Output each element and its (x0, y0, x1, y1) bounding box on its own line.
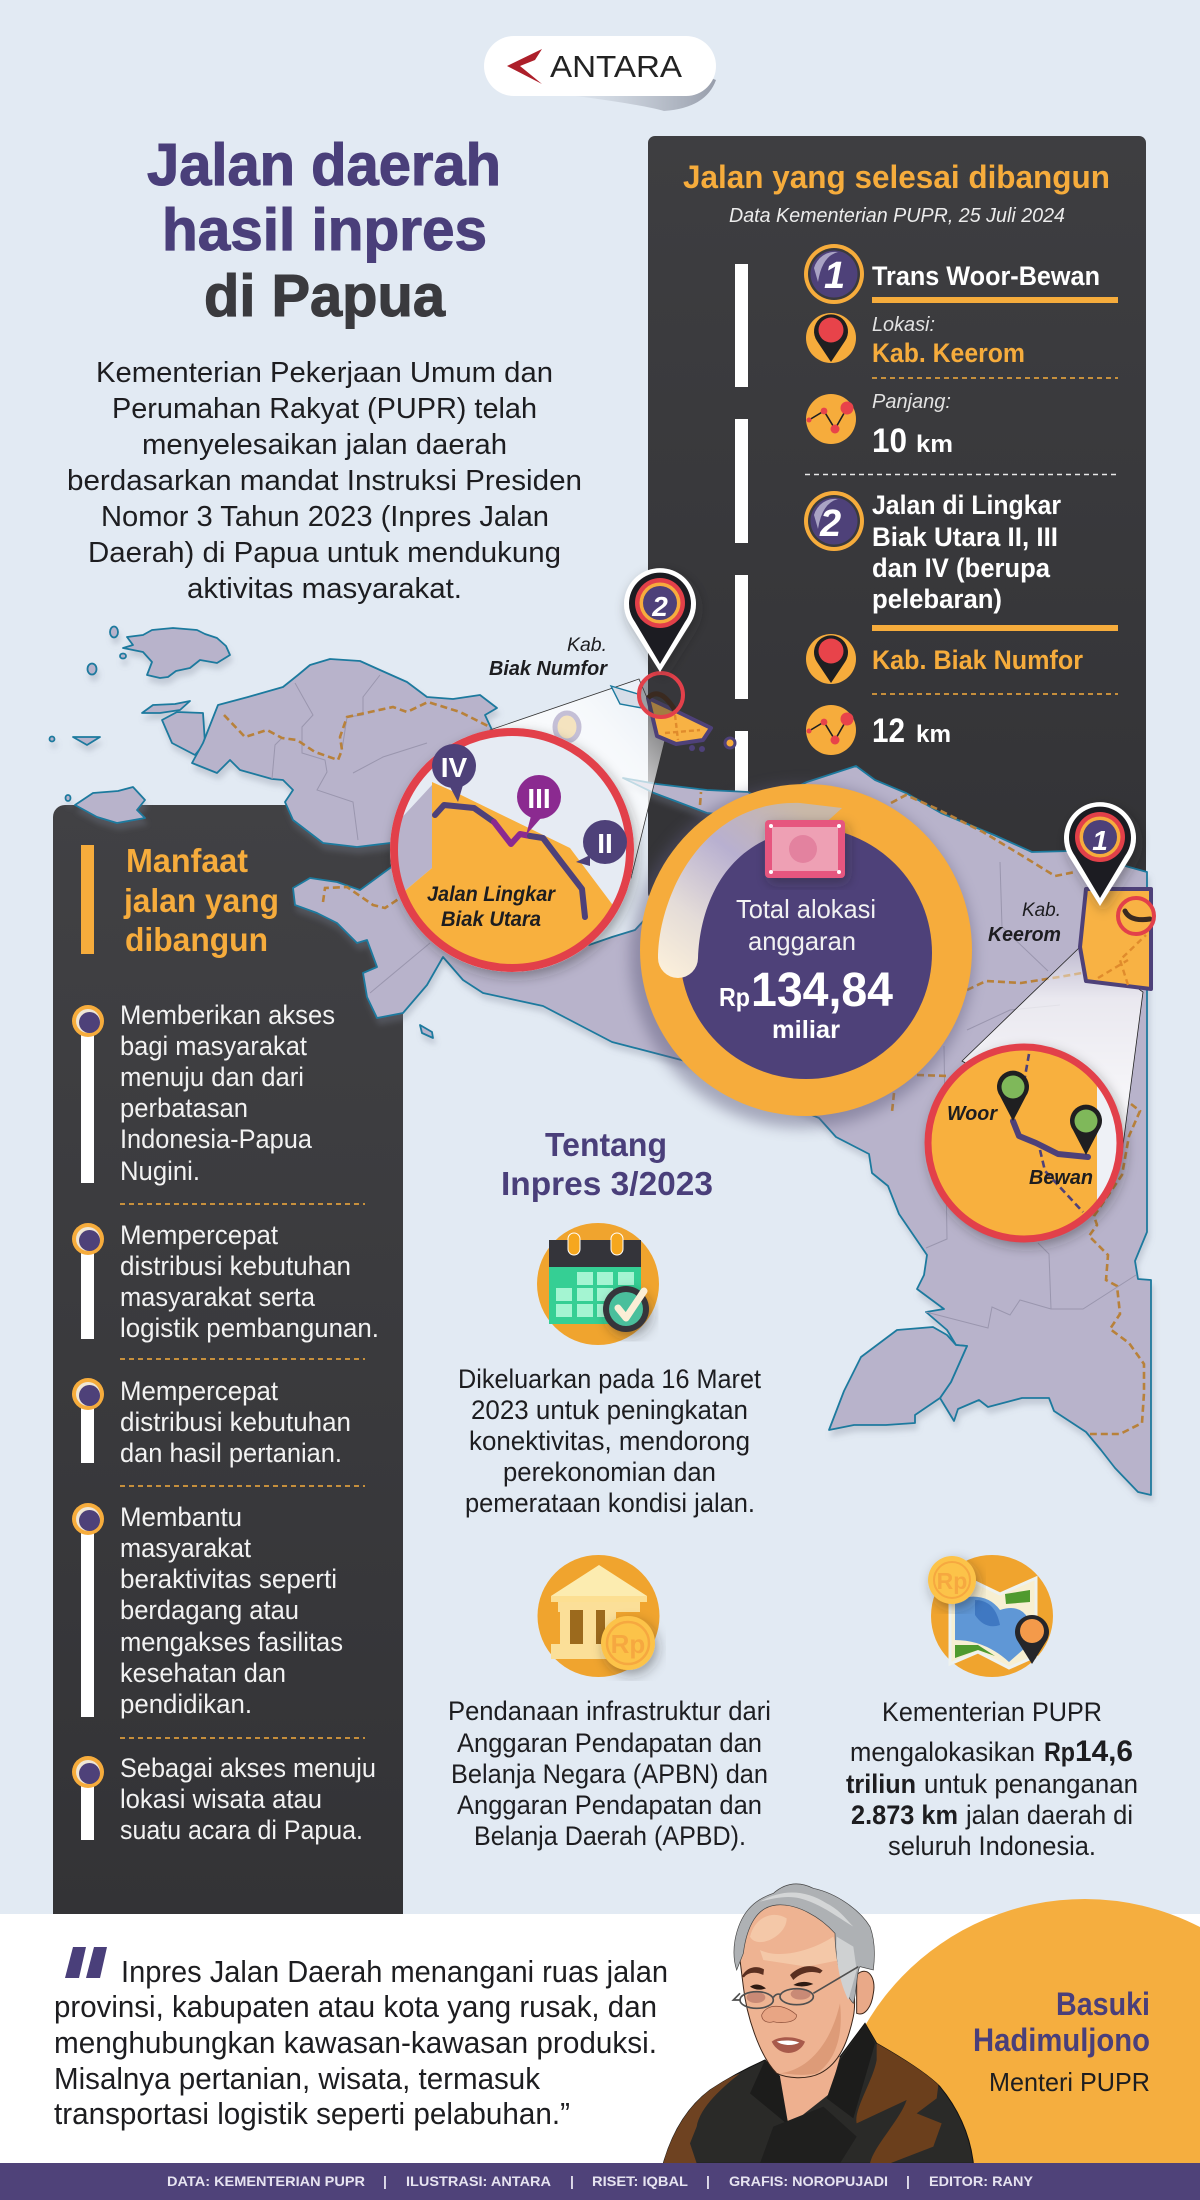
inset caption: Jalan Lingkar (427, 883, 557, 906)
label: panjang: Panjang: (872, 391, 951, 413)
benefit 5: lokasi wisata atau (120, 1784, 322, 1814)
benefit 2: masyarakat serta (120, 1282, 315, 1312)
benefits heading: dibangun (125, 921, 268, 958)
benefit 4: pendidikan. (120, 1689, 252, 1719)
icon: calendar (537, 1223, 659, 1345)
text: pendanaan: Belanja Daerah (APBD). (474, 1821, 746, 1851)
Numfor island (555, 713, 579, 741)
text: alokasi PUPR (846, 1697, 1138, 1861)
text: pendanaan: Anggaran Pendapatan dan (457, 1728, 762, 1758)
quote text (54, 1955, 668, 2131)
benefits heading: Manfaat (126, 842, 248, 879)
title: di Papua (204, 263, 446, 329)
footer credits: | (383, 2173, 387, 2189)
face (739, 1903, 855, 2078)
marker: Keerom (1064, 802, 1154, 934)
text: dikeluarkan: konektivitas, mendorong (469, 1426, 750, 1456)
text: alokasi PUPR: 2.873 km (851, 1800, 958, 1830)
highlight crescent (658, 803, 842, 978)
item 2 name (872, 490, 1061, 614)
benefits heading (123, 842, 279, 958)
value: 12 km (872, 712, 951, 750)
map highlight: Kab. Keerom (1080, 889, 1151, 989)
text: pendanaan: Pendanaan infrastruktur dari (448, 1696, 771, 1726)
benefit 3: dan hasil pertanian. (120, 1438, 342, 1468)
text: dikeluarkan (458, 1364, 762, 1518)
benefit 1: Indonesia-Papua (120, 1124, 312, 1154)
benefit 5 (72, 1753, 376, 1845)
benefit 2: distribusi kebutuhan (120, 1251, 351, 1281)
text: dikeluarkan: Dikeluarkan pada 16 Maret (458, 1364, 762, 1394)
text: alokasi PUPR: seluruh Indonesia. (888, 1831, 1096, 1861)
badge III (517, 775, 561, 835)
panel: benefits content (72, 842, 379, 1845)
intro text: aktivitas masyarakat. (187, 573, 462, 605)
value: 10 km (872, 422, 953, 460)
quote text: provinsi, kabupaten atau kota yang rusak, dan (54, 1990, 657, 2024)
labels (947, 1103, 1093, 1189)
footer credits: | (706, 2173, 710, 2189)
panel subtitle: Data Kementerian PUPR, 25 Juli 2024 (729, 204, 1065, 227)
heading: Tentang Inpres (501, 1126, 713, 1202)
heading: Tentang Inpres: Inpres 3/2023 (501, 1165, 713, 1202)
benefit 4: berdagang atau (120, 1595, 299, 1625)
benefit 4 (72, 1502, 343, 1719)
logo badge: ANTARA (550, 49, 682, 84)
icon: bank with coin (538, 1555, 660, 1677)
benefit 1 (72, 1000, 335, 1186)
budget value: miliar (772, 1016, 840, 1044)
eye bags (747, 1992, 765, 2003)
quote band (0, 1914, 1200, 2164)
map of Papua (50, 626, 1151, 1495)
trans road (1013, 1121, 1088, 1157)
biak road (435, 805, 585, 917)
benefit 4: kesehatan dan (120, 1658, 286, 1688)
text: alokasi PUPR: triliun (846, 1769, 916, 1799)
logo badge (484, 36, 716, 111)
eyes (750, 1982, 813, 1990)
minister name: Hadimuljono (973, 2022, 1150, 2058)
intro text: Perumahan Rakyat (PUPR) telah (112, 393, 537, 425)
badge: road 2 (804, 491, 864, 551)
title: Jalan daerah (147, 132, 501, 198)
icon: distance 2 (806, 705, 856, 755)
accent bar (81, 845, 94, 954)
text: alokasi PUPR: mengalokasikan (850, 1737, 1035, 1767)
footer credits (0, 2163, 1200, 2200)
ear (857, 1971, 874, 2014)
text: alokasi PUPR: 14,6 (1075, 1735, 1133, 1768)
marker: Biak (624, 568, 696, 717)
icon: bank with coin: Rp (611, 1629, 645, 1659)
intro text: Nomor 3 Tahun 2023 (Inpres Jalan (101, 501, 549, 533)
brows (742, 1966, 823, 1980)
benefit 1: perbatasan (120, 1093, 248, 1123)
benefit 4: Membantu (120, 1502, 242, 1532)
quote text: transportasi logistik seperti pelabuhan.” (54, 2097, 570, 2131)
text: alokasi PUPR: Kementerian PUPR (882, 1697, 1102, 1727)
item 2 name: Jalan di Lingkar (872, 490, 1061, 520)
label: Kab. Biak Numfor: Kab. (567, 635, 607, 656)
badge II: II (597, 828, 613, 859)
minister name (973, 1986, 1150, 2097)
text: alokasi PUPR: jalan daerah di (965, 1800, 1133, 1830)
benefit 3 (72, 1376, 351, 1468)
portrait: minister (663, 1884, 973, 2163)
item 2 name: pelebaran) (872, 584, 1002, 614)
text: pendanaan (448, 1696, 771, 1851)
panel: completed roads (648, 136, 1146, 900)
icon: location pin 1 (806, 313, 856, 363)
title (147, 132, 501, 329)
benefit 2: Mempercepat (120, 1220, 279, 1250)
intro text (67, 357, 582, 605)
benefit 3: Mempercepat (120, 1376, 279, 1406)
minister name: Menteri PUPR (989, 2067, 1150, 2097)
benefits heading: jalan yang (123, 882, 279, 919)
footer credits: DATA: KEMENTERIAN PUPR (167, 2173, 365, 2189)
benefit 4: beraktivitas seperti (120, 1564, 337, 1594)
benefit 1: Memberikan akses (120, 1000, 335, 1030)
map inset: Trans Woor-Bewan (920, 1040, 1123, 1250)
benefit 5: Sebagai akses menuju (120, 1753, 376, 1783)
benefit 2: logistik pembangunan. (120, 1313, 379, 1343)
label: Kab. Keerom: Keerom (988, 924, 1061, 946)
text: dikeluarkan: pemerataan kondisi jalan. (465, 1488, 755, 1518)
budget label (736, 894, 876, 956)
map: regency boundaries (272, 675, 1136, 1328)
marker: Keerom: 1 (1092, 825, 1108, 856)
budget label: anggaran (748, 926, 856, 956)
mouth (772, 2037, 805, 2053)
orange circle behind minister (831, 1899, 1200, 2163)
benefit 4: mengakses fasilitas (120, 1627, 343, 1657)
value: 12 km: km (916, 721, 951, 748)
budget value: Rp (719, 982, 750, 1012)
benefit 1: Nugini. (120, 1156, 200, 1186)
icon: banknote (765, 820, 845, 878)
map: dashed border roads (224, 702, 1144, 1434)
benefit 5: suatu acara di Papua. (120, 1815, 363, 1845)
budget label: Total alokasi (736, 894, 876, 924)
badge IV: IV (441, 752, 468, 783)
label: Kab. Biak Numfor (489, 635, 608, 680)
zoom funnel: Biak (490, 679, 665, 878)
footer credits: GRAFIS: NOROPUJADI (729, 2173, 888, 2189)
quote text: Inpres Jalan Daerah menangani ruas jalan (121, 1955, 668, 1989)
benefit 1: menuju dan dari (120, 1062, 304, 1092)
heading: Tentang Inpres: Tentang (545, 1126, 667, 1163)
benefit 4: masyarakat (120, 1533, 252, 1563)
label: Kab. Biak Numfor: Biak Numfor (489, 658, 608, 680)
text: pendanaan: Belanja Negara (APBN) dan (451, 1759, 768, 1789)
title: hasil inpres (162, 197, 487, 263)
quote text: Misalnya pertanian, wisata, termasuk (54, 2062, 541, 2096)
labels: Woor (947, 1103, 998, 1125)
badge III: III (527, 783, 551, 814)
icon: distance 1 (806, 394, 856, 444)
icon: map with coin: Rp (937, 1568, 967, 1594)
text: pendanaan: Anggaran Pendapatan dan (457, 1790, 762, 1820)
benefit 3: distribusi kebutuhan (120, 1407, 351, 1437)
quote mark (65, 1947, 107, 1978)
footer credits: EDITOR: RANY (929, 2173, 1034, 2189)
benefit 1: bagi masyarakat (120, 1031, 308, 1061)
value: 10 km: 10 (872, 422, 907, 460)
badge: road 1: 1 (824, 255, 845, 297)
panel: benefits background (53, 805, 403, 1914)
footer credits: ILUSTRASI: ANTARA (406, 2173, 551, 2189)
value: Kab. Biak Numfor: Kab. Biak Numfor (872, 645, 1083, 675)
text: dikeluarkan: 2023 untuk peningkatan (471, 1395, 748, 1425)
text: alokasi PUPR: Rp (1044, 1737, 1075, 1767)
badge: road 1 (804, 244, 864, 304)
budget circle (630, 784, 974, 1128)
intro text: Daerah) di Papua untuk mendukung (88, 537, 561, 569)
text: dikeluarkan: perekonomian dan (503, 1457, 716, 1487)
map inset: Jalan Lingkar Biak Utara (380, 728, 640, 990)
shirt (663, 2023, 973, 2163)
pin: Woor (997, 1071, 1029, 1121)
glasses (733, 1967, 858, 2008)
item 2 name: Biak Utara II, III (872, 522, 1058, 552)
intro text: Kementerian Pekerjaan Umum dan (96, 357, 553, 389)
quote text: menghubungkan kawasan-kawasan produksi. (54, 2026, 657, 2060)
label: lokasi: Lokasi: (872, 314, 935, 336)
hair (734, 1884, 874, 2003)
inset caption: Biak Utara (441, 908, 541, 931)
budget value: 134,84 (751, 964, 893, 1017)
intro text: menyelesaikan jalan daerah (142, 429, 507, 461)
panel heading: Jalan yang selesai dibangun (683, 159, 1110, 195)
label: Kab. Keerom: Kab. (1022, 900, 1061, 921)
Dolak island (829, 1327, 967, 1430)
badge II (576, 820, 627, 866)
nose (762, 2006, 797, 2023)
badge: road 2: 2 (819, 503, 841, 545)
value: 12 km: 12 (872, 712, 905, 750)
text: alokasi PUPR: untuk penanganan (924, 1769, 1138, 1799)
benefit 2 (72, 1220, 379, 1343)
mainland (192, 659, 1151, 1495)
zoom funnel: Keerom (962, 947, 1143, 1153)
inset caption (427, 883, 557, 931)
icon: location pin 2 (806, 634, 856, 684)
item 2 name: dan IV (berupa (872, 553, 1051, 583)
labels: Bewan (1029, 1167, 1093, 1189)
item 1 name: Trans Woor-Bewan (872, 261, 1100, 291)
budget value (719, 964, 893, 1044)
road centre line (735, 264, 748, 801)
pin: Bewan (1070, 1105, 1102, 1155)
footer credits: | (906, 2173, 910, 2189)
minister name: Basuki (1056, 1986, 1150, 2022)
badge IV (432, 744, 476, 802)
footer credits: RISET: IQBAL (592, 2173, 688, 2189)
icon: map with coin (928, 1555, 1053, 1677)
intro text: berdasarkan mandat Instruksi Presiden (67, 465, 582, 497)
footer credits: | (570, 2173, 574, 2189)
value: Kab. Keerom: Kab. Keerom (872, 338, 1025, 368)
map highlight: Biak island (611, 686, 735, 752)
value: 10 km: km (916, 431, 953, 458)
label: Kab. Keerom (988, 900, 1061, 946)
marker: Biak: 2 (651, 591, 668, 622)
